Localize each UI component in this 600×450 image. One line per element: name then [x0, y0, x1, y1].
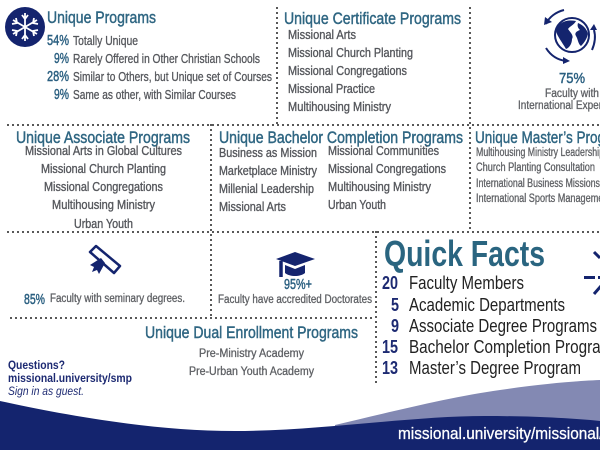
list: bachelor programs right column: Missional Congregations [328, 161, 446, 176]
list: certificate programs: Missional Practice [288, 81, 375, 96]
list: certificate programs [288, 27, 413, 114]
list: bachelor programs right column [328, 143, 446, 212]
stat: 75%: 75% [559, 71, 585, 87]
text block: questions contact [8, 360, 132, 398]
panel: quick facts [382, 233, 600, 378]
text: faculty have accredited doctorates: Faculty have accredited Doctorates [218, 294, 372, 306]
panel: unique dual enrollment programs [145, 323, 358, 378]
stat list: program uniqueness: 28% [47, 69, 69, 85]
icon: snowflake [5, 7, 45, 47]
stat list: program uniqueness: 9% [54, 87, 69, 103]
stat list: program uniqueness: Same as other, with Similar Courses [73, 87, 236, 102]
icon: graduation cap [276, 252, 315, 277]
panel: accredited doctorates [218, 252, 372, 306]
list: quick facts numbers: 20 [382, 273, 398, 293]
list: quick facts numbers: 5 [391, 295, 399, 315]
text: faculty with seminary degrees: Faculty with seminary degrees. [50, 293, 185, 305]
list: certificate programs: Multihousing Ministry [288, 99, 391, 114]
stat list: program uniqueness [47, 33, 272, 103]
icon: diploma scroll [90, 246, 120, 274]
list: bachelor programs left column: Missional Arts [219, 199, 286, 214]
panel: unique certificate programs [284, 9, 461, 114]
panel: unique bachelor completion programs [219, 128, 463, 214]
list: dual enrollment programs: Pre-Ministry Academy [199, 348, 304, 360]
list: master's programs [476, 147, 600, 205]
list: associate programs [25, 143, 182, 231]
panel: unique programs [5, 7, 272, 103]
list: dual enrollment programs [189, 348, 314, 378]
stat list: program uniqueness: 9% [54, 51, 69, 67]
list: quick facts numbers: 13 [382, 358, 398, 378]
list: quick facts numbers [382, 273, 600, 378]
stat list: program uniqueness: Similar to Others, but Unique set of Courses [73, 69, 272, 84]
icon: globe with arrows [544, 10, 597, 64]
stat list: program uniqueness: Totally Unique [73, 33, 138, 48]
list: quick facts numbers: 9 [391, 316, 399, 336]
text block: questions contact: Questions? [8, 360, 65, 372]
heading: associate programs: Unique Associate Programs [16, 128, 190, 147]
heading: quick facts: Quick Facts [384, 233, 545, 274]
list: certificate programs: Missional Congregations [288, 63, 407, 78]
list: quick facts numbers: Academic Departments [409, 295, 565, 315]
list: bachelor programs left column: Marketplace Ministry [219, 163, 317, 178]
list: bachelor programs left column: Millenial Leadership [219, 181, 314, 196]
list: bachelor programs right column: Missional Communities [328, 143, 439, 158]
heading: dual enrollment programs: Unique Dual Enrollment Programs [145, 323, 358, 342]
list: associate programs: Missional Church Planting [41, 161, 166, 176]
list: certificate programs: Missional Arts [288, 27, 356, 42]
stat: 95%+: 95%+ [284, 277, 312, 293]
panel: unique associate programs [16, 128, 190, 231]
heading: certificate programs: Unique Certificate Programs [284, 9, 461, 28]
text block: questions contact: Sign in as guest. [8, 386, 84, 398]
list: bachelor programs right column: Urban Youth [328, 197, 386, 212]
panel: international experience [518, 10, 600, 112]
icon: cropped burst [584, 252, 600, 294]
heading: bachelor completion programs: Unique Bachelor Completion Programs [219, 128, 463, 147]
footer wave [0, 380, 600, 450]
list: associate programs: Urban Youth [74, 216, 133, 231]
stat: 85%: 85% [24, 292, 45, 308]
list: quick facts numbers: Faculty Members [409, 273, 524, 293]
panel: seminary degrees [24, 246, 185, 308]
list: quick facts numbers: 15 [382, 337, 398, 357]
stat list: program uniqueness: Rarely Offered in Other Christian Schools [73, 51, 260, 66]
list: bachelor programs right column: Multihousing Ministry [328, 179, 431, 194]
list: dual enrollment programs: Pre-Urban Youth Academy [189, 366, 314, 378]
list: associate programs: Missional Congregations [44, 179, 163, 194]
text block: questions contact: missional.university/smp [8, 373, 132, 385]
list: bachelor programs left column: Business as Mission [219, 145, 317, 160]
list: associate programs: Multihousing Ministry [52, 197, 155, 212]
stat list: program uniqueness: 54% [47, 33, 69, 49]
list: associate programs: Missional Arts in Global Cultures [25, 143, 182, 158]
heading: unique programs: Unique Programs [47, 8, 156, 27]
list: certificate programs: Missional Church Planting [288, 45, 413, 60]
text: faculty with international experience [518, 88, 600, 112]
list: bachelor programs left column [219, 145, 317, 214]
panel: unique master's programs [475, 128, 600, 205]
